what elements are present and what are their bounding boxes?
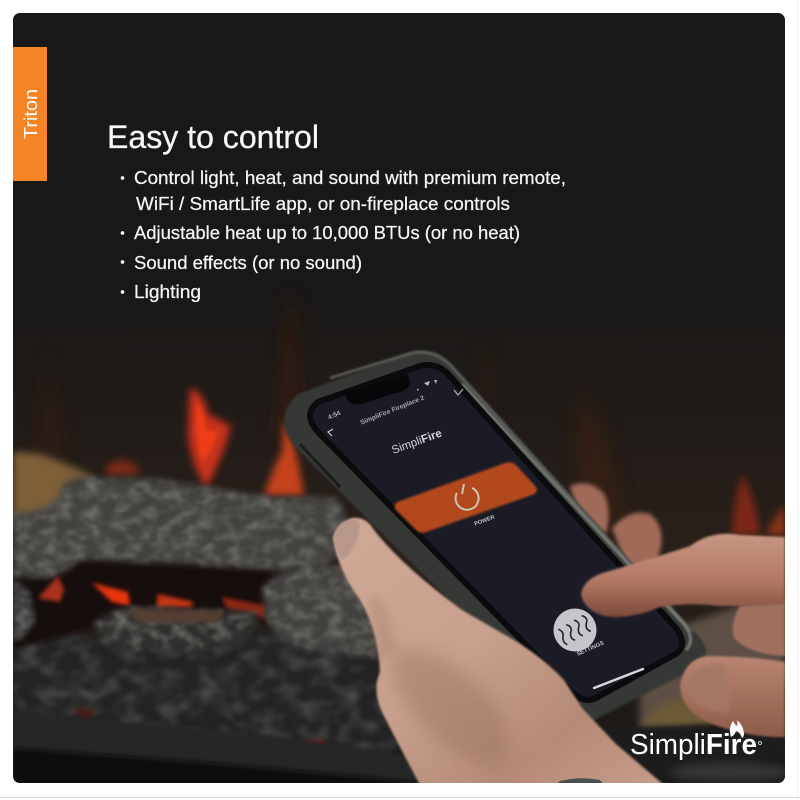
back chevron [328,429,333,436]
power label: POWER [474,515,496,527]
bullet: controls: Control light, heat, and sound with premium remote, [134,167,566,188]
heading: Easy to control [107,119,319,155]
collapse chevron [454,389,463,395]
brand logo: SimpliFire: SimpliFire [630,729,757,761]
right log [262,565,378,658]
thumbnail [334,519,360,560]
case highlight [330,352,692,632]
status time: 4:54 [327,410,342,421]
settings icon [557,614,593,646]
app logo: SimpliFire [390,428,444,457]
bullet: heat: Adjustable heat up to 10,000 BTUs (or no heat) [134,222,520,243]
tag: Triton [13,47,47,181]
dark gap behind logs [13,560,280,651]
flames [40,290,785,535]
screen [310,365,682,700]
home bar [594,669,643,688]
lower log [93,606,258,652]
tag: Triton: Triton [21,89,41,139]
coals [13,630,400,752]
phone [284,350,706,723]
fireplace ledge [13,712,420,785]
settings button [554,608,596,652]
status icons [417,380,437,390]
glowing embers [38,576,268,618]
power button [395,462,537,533]
bullet: lighting: Lighting [134,281,201,302]
pointing index finger [581,534,785,617]
knuckle shading [391,649,508,770]
middle finger [733,604,785,656]
registered mark [758,742,762,744]
logs [13,452,378,658]
holding hand [333,518,664,785]
tan log end [13,452,92,520]
bullet: sound: Sound effects (or no sound) [134,252,362,273]
fingers behind phone [570,483,662,575]
tattoo [558,778,602,783]
thumb on right [680,656,785,737]
bullet: controls: WiFi / SmartLife app, or on-fireplace controls [136,193,510,214]
power icon [454,487,480,511]
bullet list [121,167,566,302]
settings label: SETTINGS [576,640,605,658]
notch [346,374,410,404]
app title: SimpliFire Fireplace 2 [360,394,426,427]
upper log [13,477,350,578]
logo flame [730,720,744,738]
left log fragment [13,578,36,640]
side buttons [300,444,340,487]
bullet: controls [121,167,566,214]
phone case [284,350,706,723]
right background blur: logs and coals [635,593,785,783]
